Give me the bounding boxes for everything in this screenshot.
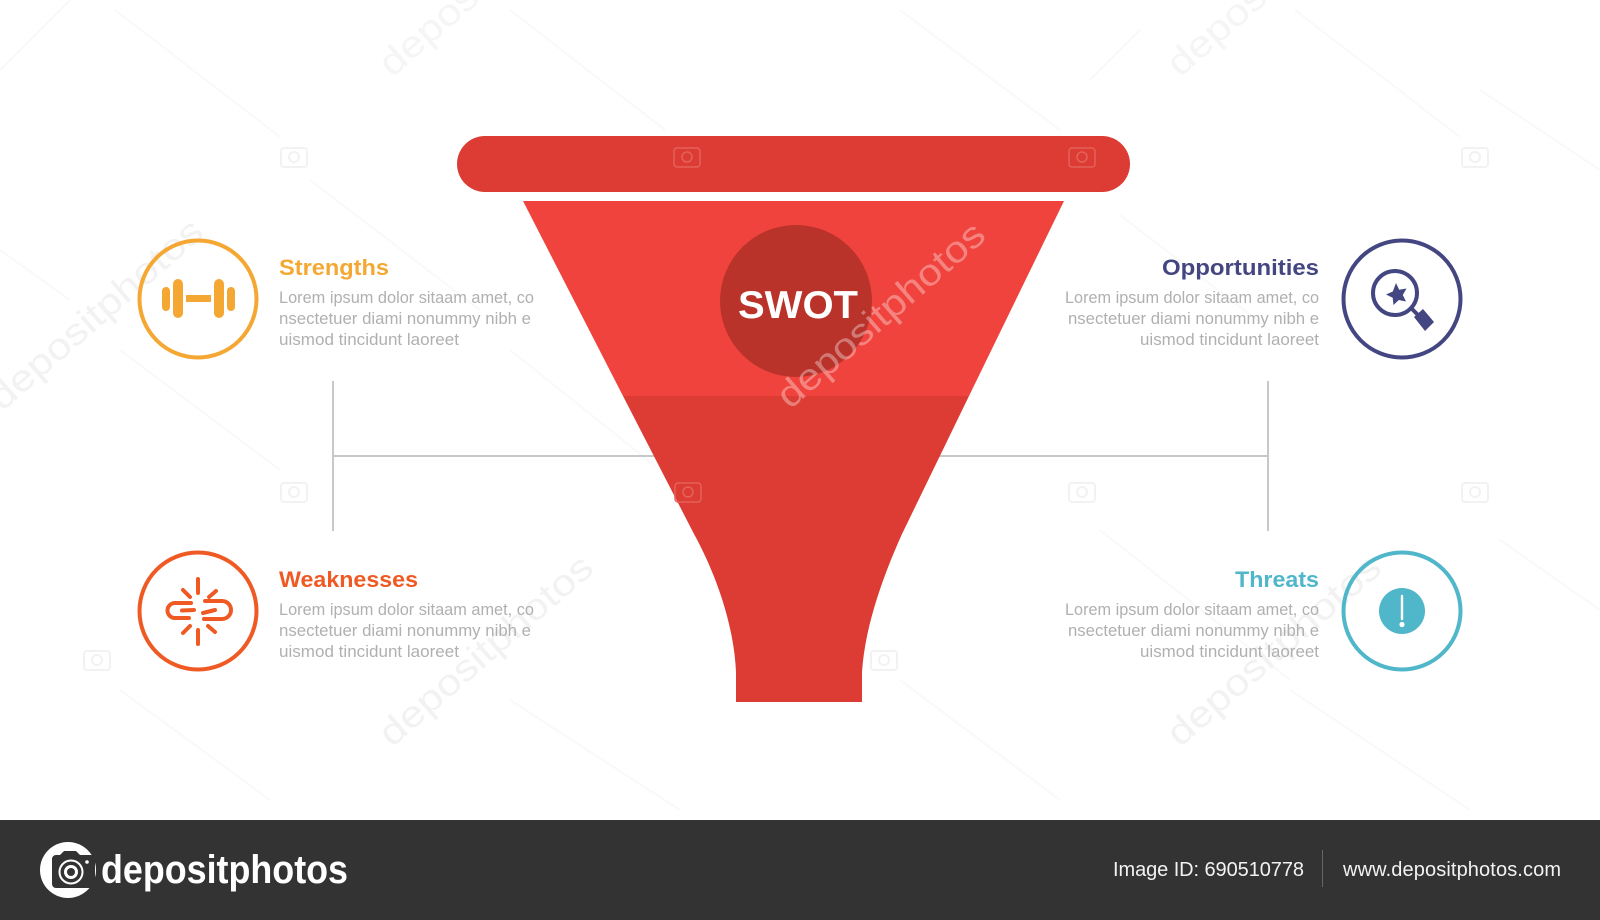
- text block: threats: uismod tincidunt laoreet: [1140, 642, 1319, 661]
- funnel lower section: [623, 396, 969, 702]
- text block: opportunities: [1065, 288, 1319, 349]
- icon: broken chain: [140, 552, 256, 670]
- panel: weaknesses: [140, 552, 534, 670]
- icon: exclamation: [1344, 552, 1460, 670]
- connector: right bracket: [935, 381, 1268, 531]
- icon: dumbbell: [140, 240, 256, 358]
- text block: strengths: uismod tincidunt laoreet: [279, 330, 459, 349]
- heading: opportunities: Opportunities: [1162, 255, 1319, 280]
- panel: threats: [1065, 552, 1460, 670]
- funnel: [457, 136, 1130, 702]
- funnel faint camera marks: [674, 148, 1095, 502]
- text block: weaknesses: [279, 600, 534, 661]
- center badge label: SWOT: [738, 284, 858, 327]
- text block: threats: nsectetuer diami nonummy nibh e: [1068, 621, 1319, 640]
- icon: camera logo: [40, 842, 96, 898]
- text block: strengths: Lorem ipsum dolor sitaam amet, co: [279, 288, 534, 307]
- text block: weaknesses: Lorem ipsum dolor sitaam amet, co: [279, 600, 534, 619]
- panel: strengths: [140, 240, 534, 358]
- watermark: camera icons: [84, 148, 1488, 670]
- text block: threats: Lorem ipsum dolor sitaam amet, co: [1065, 600, 1319, 619]
- text block: threats: [1065, 600, 1319, 661]
- text block: strengths: [279, 288, 534, 349]
- funnel upper section: [523, 201, 1064, 396]
- footer bar: [0, 820, 1600, 920]
- panel: opportunities: [1065, 240, 1460, 358]
- icon: magnifier with star: [1344, 240, 1460, 358]
- watermark: photo stock text, lower right: depositphotos: [1158, 546, 1389, 754]
- center badge: [720, 225, 872, 377]
- image id: Image ID: 690510778: [1113, 859, 1304, 881]
- text block: weaknesses: uismod tincidunt laoreet: [279, 642, 459, 661]
- watermark across funnel: depositphotos: [768, 213, 993, 416]
- website url: www.depositphotos.com: [1342, 859, 1561, 881]
- heading: weaknesses: Weaknesses: [279, 567, 418, 592]
- text block: opportunities: Lorem ipsum dolor sitaam amet, co: [1065, 288, 1319, 307]
- logo wordmark: depositphotos: [101, 848, 348, 892]
- heading: strengths: Strengths: [279, 255, 389, 280]
- text block: strengths: nsectetuer diami nonummy nibh e: [279, 309, 531, 328]
- funnel rim: [457, 136, 1130, 192]
- connector: left bracket: [333, 381, 660, 531]
- watermark: photo stock text, lower left: depositphotos: [370, 546, 601, 754]
- heading: threats: Threats: [1235, 567, 1319, 592]
- text block: opportunities: uismod tincidunt laoreet: [1140, 330, 1319, 349]
- text block: weaknesses: nsectetuer diami nonummy nibh e: [279, 621, 531, 640]
- text block: opportunities: nsectetuer diami nonummy nibh e: [1068, 309, 1319, 328]
